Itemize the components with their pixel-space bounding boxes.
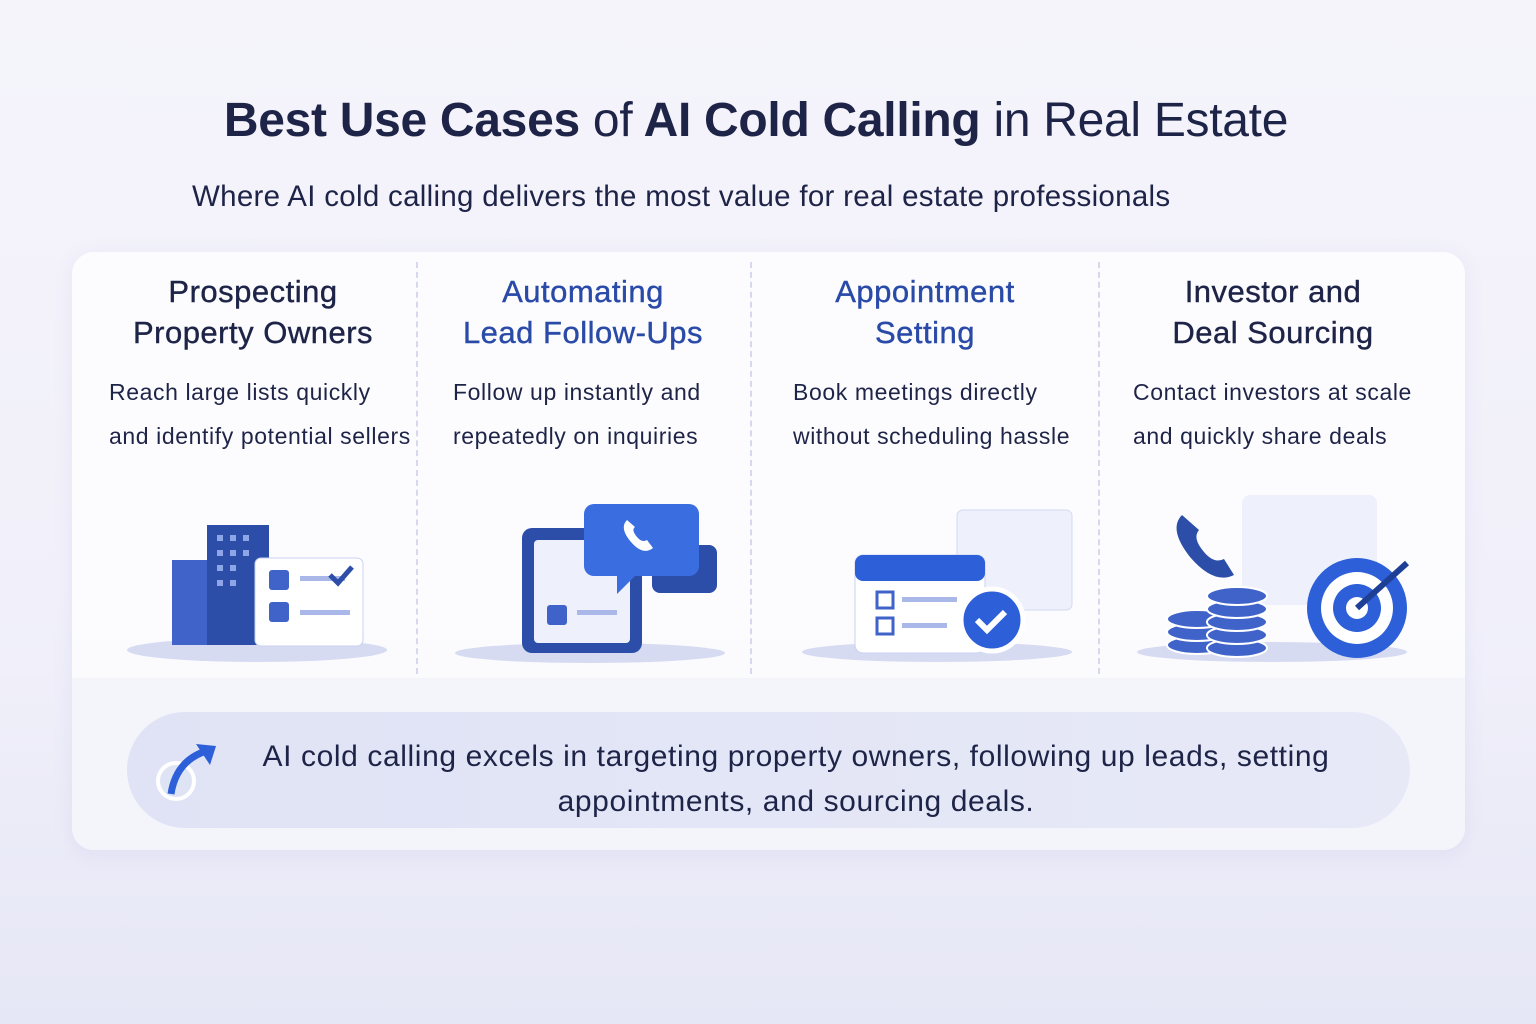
column: prospecting: Reach large lists quickly xyxy=(109,379,371,405)
callout: summary pill xyxy=(127,712,1410,828)
column: prospecting: Property Owners xyxy=(133,315,373,350)
column: prospecting: Prospecting xyxy=(168,274,338,309)
column: prospecting xyxy=(109,274,411,449)
column: investor: Investor and xyxy=(1185,274,1361,309)
column: follow-ups: Follow up instantly and xyxy=(453,379,701,405)
column: follow-ups xyxy=(453,274,703,449)
column: follow-ups: Lead Follow-Ups xyxy=(463,315,703,350)
column: appointment: Appointment xyxy=(835,274,1015,309)
icon: calendar with check xyxy=(802,510,1072,662)
callout: summary pill: AI cold calling excels in targeting property owners, following up leads, setting appointments, and sourcing deals. xyxy=(263,740,1329,818)
title: Best Use Cases of AI Cold Calling in Real Estate xyxy=(224,94,1288,147)
icon: buildings and checklist xyxy=(127,525,387,662)
column: follow-ups: Automating xyxy=(502,274,664,309)
column: appointment: Setting xyxy=(875,315,975,350)
icon: phone, coins, target xyxy=(1137,495,1407,662)
column: investor: Contact investors at scale xyxy=(1133,379,1412,405)
column: appointment: without scheduling hassle xyxy=(793,423,1070,449)
panel: main card xyxy=(72,252,1465,850)
column: prospecting: and identify potential sellers xyxy=(109,423,411,449)
column: follow-ups: repeatedly on inquiries xyxy=(453,423,698,449)
illustrations xyxy=(127,495,1409,663)
column: investor: and quickly share deals xyxy=(1133,423,1387,449)
icon: tablet with phone bubble xyxy=(455,504,725,663)
subtitle: Where AI cold calling delivers the most value for real estate professionals xyxy=(192,180,1170,213)
icon: gear arrow xyxy=(156,744,216,801)
column: investor: Deal Sourcing xyxy=(1172,315,1374,350)
column: investor xyxy=(1133,274,1412,449)
column: appointment: Book meetings directly xyxy=(793,379,1038,405)
column: appointment xyxy=(793,274,1070,449)
